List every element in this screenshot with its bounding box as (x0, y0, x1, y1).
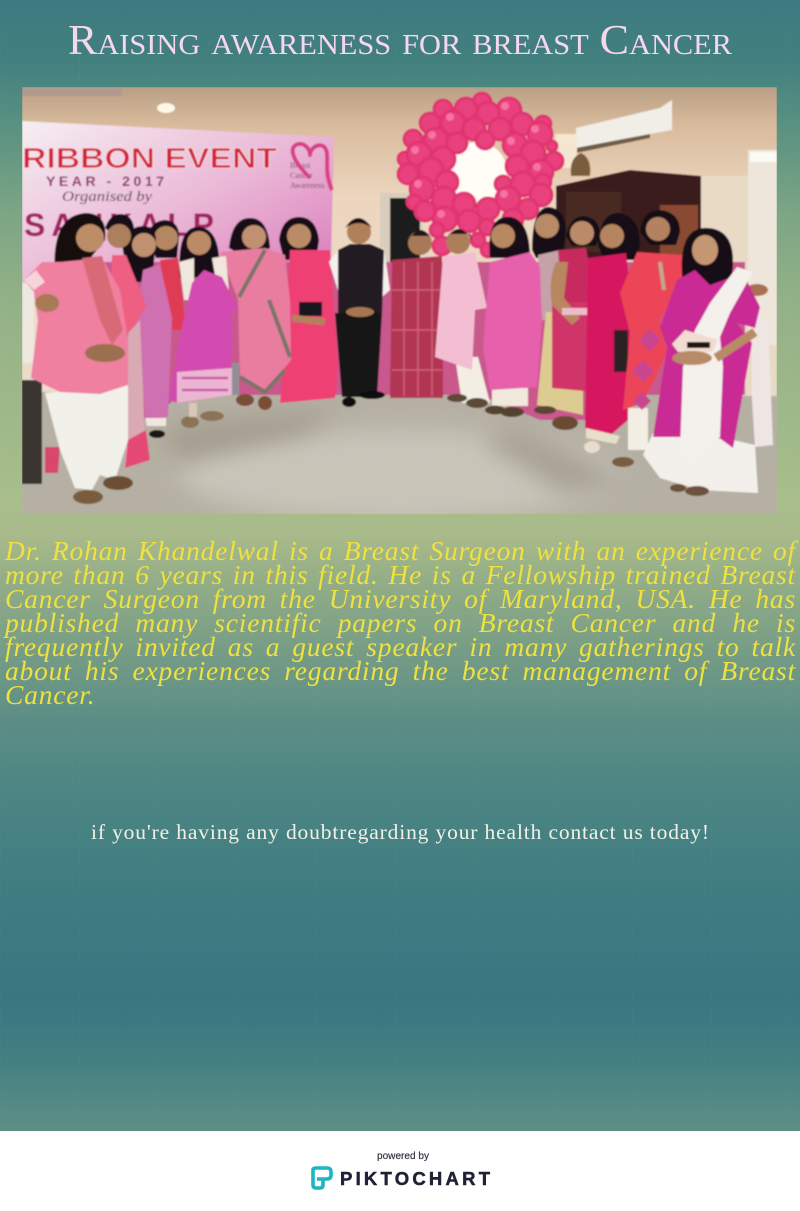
banner (22, 121, 334, 363)
bright wall patch beside ribbon (555, 134, 577, 168)
woman in beige skirt (532, 207, 583, 415)
woman in pink kurta (483, 217, 542, 417)
woman in red sari (279, 217, 338, 403)
footer: powered by Piktochart (0, 1131, 800, 1211)
woman in pink sari with grey border (220, 218, 291, 410)
woman in magenta kurta with white scarf (643, 228, 773, 496)
wooden cabinet and teapot (556, 153, 701, 260)
biography paragraph (3, 535, 798, 710)
powered by text: powered by (377, 1151, 429, 1162)
wordmark: PIKTOCHART (340, 1168, 491, 1189)
floor (22, 392, 777, 520)
biography paragraph: more than 6 years in this field. He is a Fellowship trained Breast (5, 559, 796, 590)
banner: YEAR - 2017 (46, 173, 164, 189)
biography paragraph: published many scientific papers on Breast Cancer and he is (5, 607, 796, 638)
biography paragraph: Cancer Surgeon from the University of Maryland, USA. He has (5, 583, 796, 614)
biography paragraph: frequently invited as a guest speaker in many gatherings to talk (5, 631, 796, 662)
biography paragraph: Cancer. (5, 679, 95, 710)
room wall and ceiling (22, 87, 777, 407)
woman behind in patterned pink (45, 214, 150, 473)
banner: Awareness (290, 181, 324, 190)
woman in long crimson kurta (584, 213, 640, 453)
banner: Breast (290, 161, 311, 170)
event group photo (22, 87, 777, 514)
banner: Cancer (290, 171, 313, 180)
banner: Organised by (62, 189, 152, 205)
biography paragraph: about his experiences regarding the best management of Breast (5, 655, 796, 686)
woman in mauve kurta (122, 226, 172, 438)
icon: Piktochart logo (313, 1168, 331, 1188)
whiteboard and right wall (701, 150, 777, 396)
doorway (380, 193, 422, 263)
pink balloon ribbon (371, 93, 563, 389)
woman in red-orange print dress (612, 210, 768, 467)
woman in red jacket (147, 220, 186, 330)
banner: RIBBON EVENT (22, 143, 277, 175)
woman in magenta kurta with border (169, 227, 239, 428)
shaded crowd backing between figures (60, 262, 745, 420)
title: Raising awareness for breast Cancer (68, 18, 733, 64)
call to action: if you're having any doubtregarding your health contact us today! (91, 820, 709, 844)
air conditioner (576, 100, 672, 153)
banner: SANKALP (24, 207, 214, 243)
woman in crimson kurta with pink yoke (551, 216, 600, 430)
man in black vest (329, 218, 390, 407)
biography paragraph: Dr. Rohan Khandelwal is a Breast Surgeon with an experience of (5, 535, 796, 566)
woman in light pink kurta (435, 229, 490, 408)
woman in front left, pink kurta and white salwar (22, 213, 133, 504)
woman in maroon print dress (390, 230, 443, 398)
